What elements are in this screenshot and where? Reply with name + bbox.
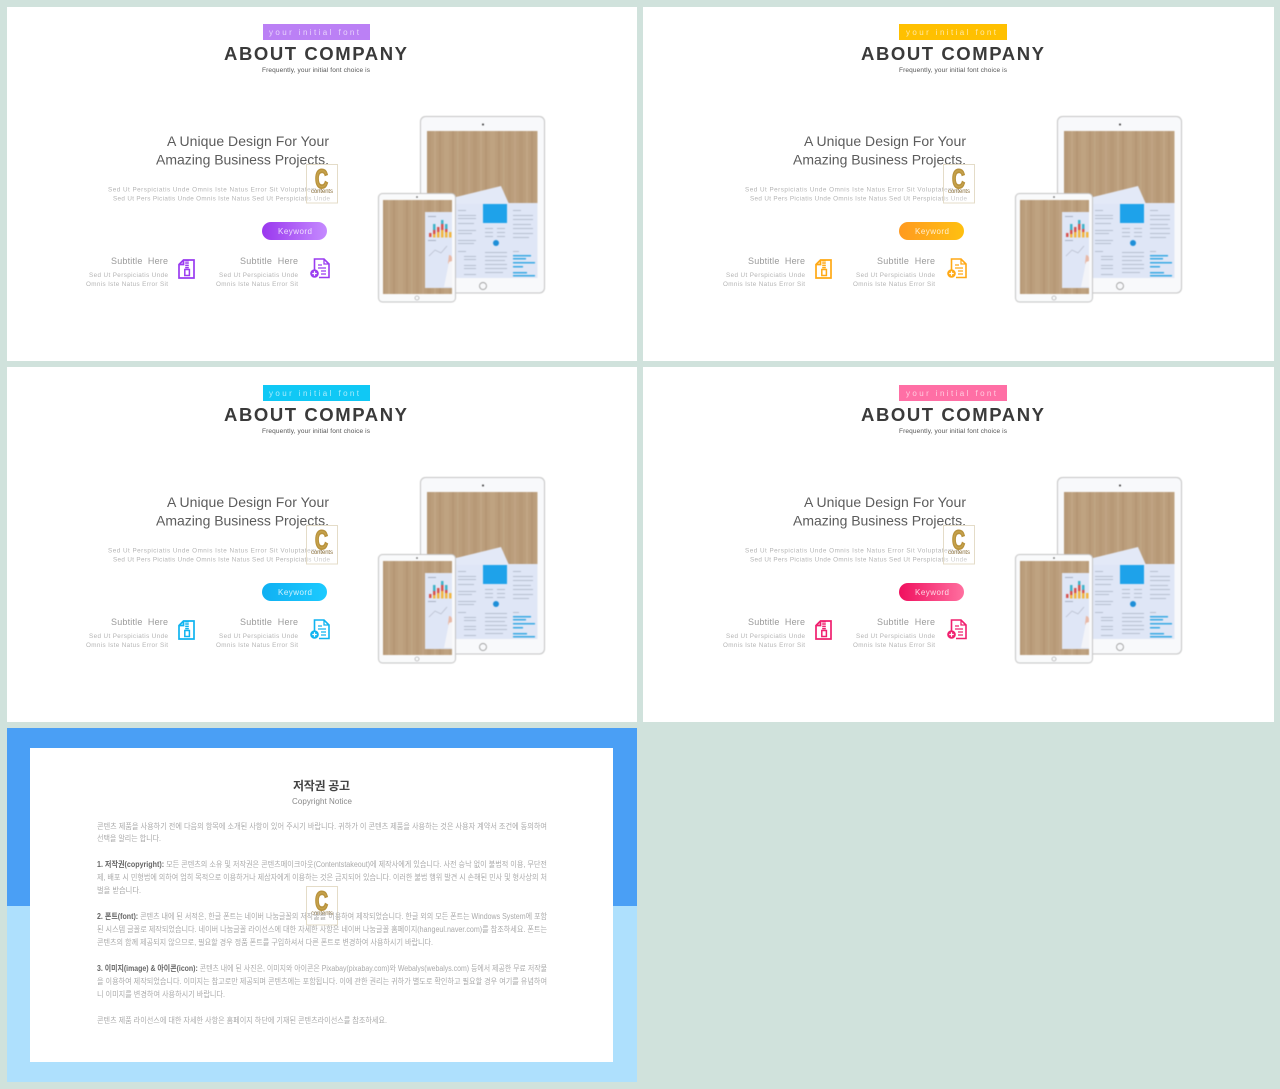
section 1: copyright [97,859,547,895]
watermark: C [952,164,965,194]
feature: subtitle left: Sed Ut Perspiciatis Unde [726,272,805,279]
feature: subtitle right: Omnis Iste Natus Error Sit [853,642,935,649]
keyword button [262,222,327,240]
tag: your initial font [899,385,1007,401]
icon: zip file [179,260,194,278]
watermark [944,525,974,564]
icon: document add [310,259,329,278]
watermark: contents [311,911,333,917]
watermark: contents [948,189,970,195]
icon: zip file [816,260,831,278]
subtitle: Frequently, your initial font choice is [899,428,1008,435]
section 3: image and icon: 을 이용하여 제작되었습니다. 이미지는 참고로만 제공되며 콘텐츠에는 포함됩니다. 이에 관한 권리는 귀하가 별도로 확인하고 필요할 경우 여기를 유념하여 [97,976,547,986]
body text: Sed Ut Perspiciatis Unde Omnis Iste Natus Error Sit Voluptatem A [108,186,324,194]
keyword button [262,583,327,601]
watermark: C [952,525,965,555]
section 2: font: 된 시스템 글꼴로 제작되었습니다. 네이버 나눔글꼴 라이선스에 대한 자세한 사항은 네이버 나눔글꼴 홈페이지(hangeul.naver.com)를 참조하세요. 폰트는 [97,924,547,934]
body text: Sed Ut Perspiciatis Unde Omnis Iste Natus Error Sit Voluptatem A [108,548,324,554]
feature: subtitle left [723,617,805,649]
feature: subtitle right: Subtitle Here [877,256,935,266]
icon: zip file [816,621,831,639]
feature: subtitle left: Sed Ut Perspiciatis Unde [726,633,805,640]
notice title: Copyright Notice [292,797,353,806]
tag: your initial font: your initial font [906,28,997,37]
feature: subtitle left: Subtitle Here [111,617,168,627]
section 2: font: 콘텐츠의 함께 제공되지 않으므로, 필요할 경우 정품 폰트를 구입하셔서 다른 폰트로 변경하여 사용하시기 바랍니다. [97,937,433,947]
tablets mockup [1016,478,1182,663]
feature: subtitle left: Sed Ut Perspiciatis Unde [89,272,168,279]
feature: subtitle right: Sed Ut Perspiciatis Unde [219,272,298,279]
keyword button: Keyword [278,588,312,597]
section 1: copyright: 1. 저작권(copyright): 모든 콘텐츠의 소유 및 저작권은 콘텐츠메이크아웃(Contentstakeout)에 제작사에게 있습니다. 사전 승낙 없이 불법적 이용, 무단전 [97,859,547,869]
body text: Sed Ut Pers Piciatis Unde Omnis Iste Natus Sed Ut Perspiciatis Unde [113,196,330,202]
headline: Amazing Business Projects. [793,152,966,168]
closing line: 콘텐츠 제품 라이선스에 대한 자세한 사항은 홈페이지 하단에 기재된 콘텐츠라이선스를 참조하세요. [97,1015,387,1025]
section 3: image and icon [97,963,547,999]
panel: about company, cyan [7,367,637,722]
feature: subtitle right: Sed Ut Perspiciatis Unde [856,633,935,640]
intro paragraph: 선택을 알리는 합니다. [97,833,161,843]
title: ABOUT COMPANY [224,404,408,425]
headline [156,133,329,168]
feature: subtitle left: Omnis Iste Natus Error Sit [723,281,805,288]
panel: about company, purple [7,7,637,361]
feature: subtitle left: Omnis Iste Natus Error Sit [86,642,168,649]
title: ABOUT COMPANY [861,404,1045,425]
headline: Amazing Business Projects. [793,512,966,528]
feature: subtitle right: Subtitle Here [240,617,298,627]
headline [156,494,329,528]
keyword button [899,222,964,240]
keyword button: Keyword [915,588,949,597]
feature: subtitle left [86,617,168,649]
tablets mockup [1016,116,1182,302]
body text: Sed Ut Perspiciatis Unde Omnis Iste Natus Error Sit Voluptatem A [745,186,961,194]
body text: Sed Ut Pers Piciatis Unde Omnis Iste Natus Sed Ut Perspiciatis Unde [113,556,330,564]
feature: subtitle left [86,256,168,288]
feature: subtitle right: Omnis Iste Natus Error Sit [216,642,298,649]
watermark [944,164,974,203]
feature: subtitle left: Omnis Iste Natus Error Sit [86,281,168,288]
watermark: C [315,525,328,555]
keyword button: Keyword [915,227,949,236]
title: ABOUT COMPANY [224,43,408,64]
tag: your initial font [263,24,370,40]
feature: subtitle left: Subtitle Here [111,256,168,266]
tablets mockup [378,478,544,663]
headline: Amazing Business Projects. [156,512,329,528]
icon: document add [310,620,329,639]
body text [745,186,967,202]
subtitle: Frequently, your initial font choice is [262,67,371,74]
headline [793,133,966,168]
section 2: font [97,911,548,947]
icon: zip file [179,621,194,639]
panel: about company, yellow [643,7,1274,361]
feature: subtitle left: Subtitle Here [748,617,805,627]
feature: subtitle right: Omnis Iste Natus Error Sit [853,281,935,288]
subtitle: Frequently, your initial font choice is [262,428,371,435]
headline: A Unique Design For Your [804,494,966,510]
headline: A Unique Design For Your [167,494,329,510]
keyword button: Keyword [278,227,312,236]
tag: your initial font: your initial font [906,389,997,398]
tag: your initial font [899,24,1007,40]
panel: about company, pink [643,367,1274,722]
intro paragraph [97,821,547,843]
watermark [306,164,338,203]
watermark [306,886,338,925]
headline: Amazing Business Projects. [156,152,329,168]
notice title: 저작권 공고 [293,778,350,793]
section 3: image and icon: 니 이미지를 변경하여 사용하시기 바랍니다. [97,989,225,999]
body text: Sed Ut Pers Piciatis Unde Omnis Iste Natus Sed Ut Perspiciatis Unde [750,556,967,564]
body text [745,548,967,564]
section 2: font: 2. 폰트(font): 콘텐츠 내에 된 서적은, 한글 폰트는 네이버 나눔글꼴의 저작물을 이용하여 제작되었습니다. 한글 외의 모든 폰트는 Windows System에 포함 [97,911,548,921]
section 3: image and icon: 3. 이미지(image) & 아이콘(icon): 콘텐츠 내에 된 사진은, 이미지와 아이콘은 Pixabay(pixabay.com)와 Webalys(webalys.com) 등에서 제공한 무료 저작물 [97,963,547,973]
headline [793,494,966,528]
intro paragraph: 콘텐츠 제품을 사용하기 전에 다음의 항목에 소개된 사항이 있어 주시기 바랍니다. 귀하가 이 콘텐츠 제품을 사용하는 것은 사용자 계약서 조건에 동의하여 [97,821,547,831]
watermark: contents [311,550,333,556]
feature: subtitle right [853,256,935,288]
feature: subtitle left: Subtitle Here [748,256,805,266]
feature: subtitle right: Subtitle Here [240,256,298,266]
feature: subtitle left [723,256,805,288]
section 1: copyright: 벌을 받습니다. [97,885,141,895]
feature: subtitle right [216,617,298,649]
icon: document add [947,620,966,639]
title: ABOUT COMPANY [861,43,1045,64]
section 1: copyright: 제, 배포 시 민형법에 의하여 엄히 목적으로 이용하거나 제삼자에게 이용하는 것은 금지되어 있습니다. 이러한 불법 행위 발견 시 손해된 민사 및 형사상의 처 [97,872,547,882]
feature: subtitle right [853,617,935,649]
notice title [292,778,353,806]
panel: copyright notice [7,728,637,1082]
watermark: C [315,164,328,194]
tag: your initial font: your initial font [269,389,360,398]
feature: subtitle right [216,256,298,288]
watermark [306,525,338,564]
watermark: C [315,886,328,916]
feature: subtitle right: Sed Ut Perspiciatis Unde [219,633,298,640]
icon: document add [947,259,966,278]
subtitle: Frequently, your initial font choice is [899,67,1008,74]
feature: subtitle left: Omnis Iste Natus Error Sit [723,642,805,649]
feature: subtitle right: Omnis Iste Natus Error Sit [216,281,298,288]
body text [108,186,330,202]
headline: A Unique Design For Your [167,133,329,149]
watermark: contents [311,189,333,195]
headline: A Unique Design For Your [804,133,966,149]
feature: subtitle left: Sed Ut Perspiciatis Unde [89,633,168,640]
tag: your initial font [263,385,370,401]
keyword button [899,583,964,601]
watermark: contents [948,550,970,556]
body text [108,548,330,564]
feature: subtitle right: Subtitle Here [877,617,935,627]
tag: your initial font: your initial font [269,28,360,37]
body text: Sed Ut Pers Piciatis Unde Omnis Iste Natus Sed Ut Perspiciatis Unde [750,196,967,202]
tablets mockup [378,116,544,302]
feature: subtitle right: Sed Ut Perspiciatis Unde [856,272,935,279]
body text: Sed Ut Perspiciatis Unde Omnis Iste Natus Error Sit Voluptatem A [745,548,961,554]
